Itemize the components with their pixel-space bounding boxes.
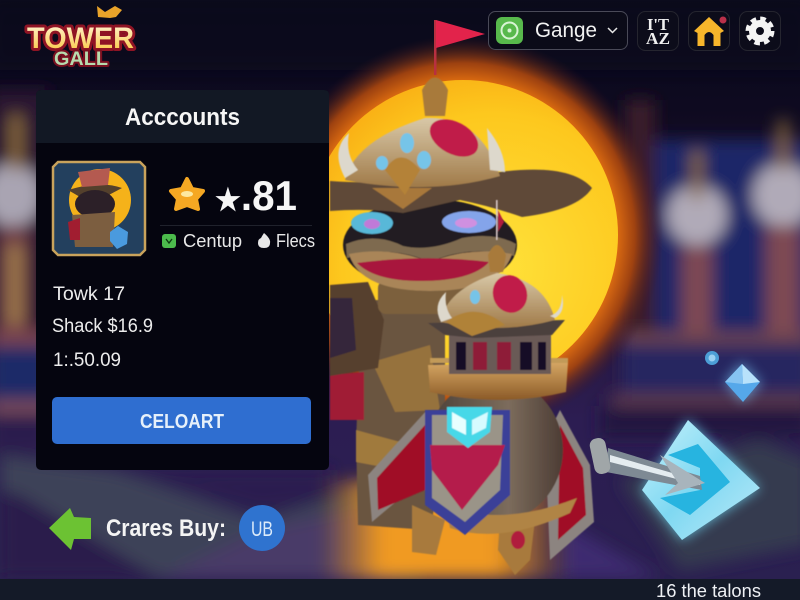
panel title: Acccounts (125, 104, 240, 131)
logo: GALL (54, 49, 108, 70)
button: settings (740, 12, 780, 50)
roof brim (428, 320, 565, 338)
body (356, 300, 445, 530)
logo crown (97, 6, 122, 18)
flag (434, 20, 485, 75)
icon: green badge (162, 234, 176, 248)
dropdown: Gange (488, 12, 628, 50)
cape left (368, 410, 430, 522)
button: CELOART (52, 397, 311, 444)
panel: accounts (36, 90, 329, 470)
finial (422, 78, 448, 116)
cape right (545, 410, 594, 560)
button: home (688, 12, 730, 50)
tower character (368, 200, 594, 575)
head (343, 199, 517, 291)
large masked character (330, 78, 592, 530)
label: Centup: Centup (183, 231, 242, 251)
windows (449, 332, 551, 374)
icon: star (171, 179, 203, 209)
stat lines (52, 284, 153, 371)
sun (263, 35, 663, 578)
icon: flame (258, 233, 270, 248)
glowing chest gem (447, 407, 492, 448)
balcony (428, 362, 568, 400)
panel header (36, 90, 329, 143)
button: translate: AZ (646, 29, 670, 48)
staff with crystal blade (588, 420, 760, 540)
arrow: back (49, 508, 91, 550)
label: Crares Buy: Crares Buy: (106, 515, 226, 542)
label: Flecs: Flecs (276, 231, 315, 251)
button: CELOART: CELOART (140, 411, 224, 433)
logo (27, 6, 134, 70)
arm (330, 282, 384, 376)
dropdown: Gange: Gange (535, 19, 597, 42)
top toolbar (488, 12, 780, 50)
dome (441, 273, 555, 328)
shield (425, 410, 510, 535)
button: translate: I'T (647, 15, 670, 34)
stat lines: Towk 17 (53, 284, 125, 305)
egg body (427, 378, 563, 522)
eyes (351, 212, 393, 234)
logo wordmark: TOWER (27, 22, 134, 55)
portrait (53, 162, 145, 255)
rating value: ★.81 (215, 172, 297, 219)
icon: UB badge (239, 505, 285, 551)
button: translate (638, 12, 678, 50)
floating gems (705, 351, 762, 403)
stat lines: Shack $16.9 (52, 316, 153, 337)
feet (412, 505, 445, 555)
footer bar (0, 579, 800, 600)
icon: UB badge: UB (251, 518, 273, 541)
finial (488, 245, 506, 272)
dome (345, 118, 500, 187)
neck (378, 280, 478, 314)
hat brim (330, 170, 592, 217)
stat lines: 1:.50.09 (53, 350, 121, 371)
